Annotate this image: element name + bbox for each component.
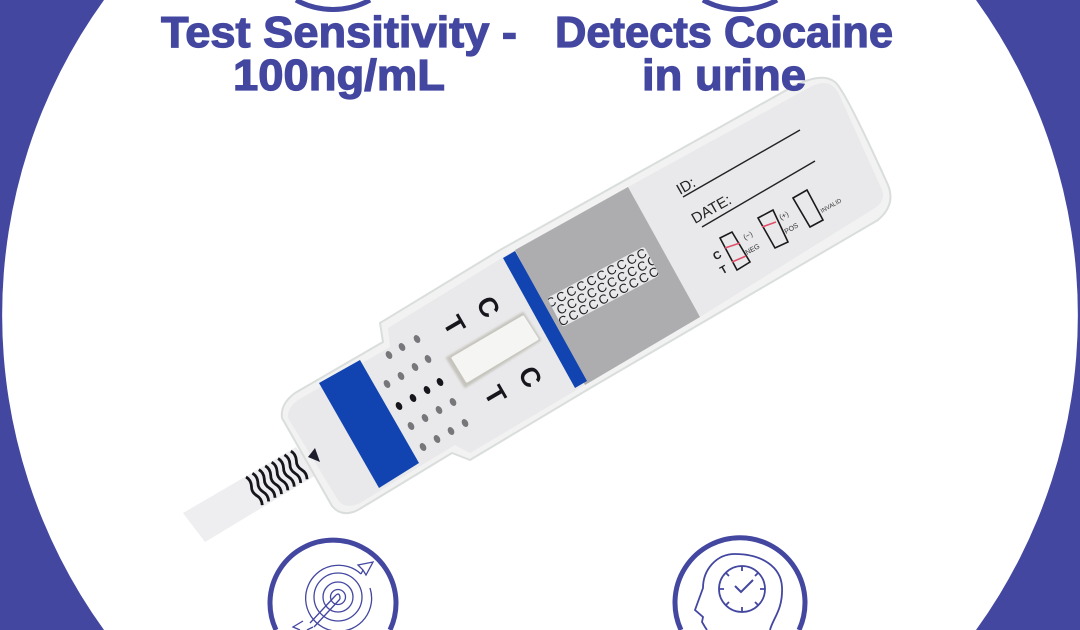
foil window: CCCCCCCCCCCC: [556, 252, 683, 329]
heading: test sensitivity: [161, 8, 517, 100]
strip wave marks: [245, 450, 308, 506]
positive result box: POS: [784, 222, 800, 236]
negative result box: C: [711, 249, 724, 263]
device body: [282, 78, 890, 513]
window labels: [437, 291, 548, 410]
window labels: T: [478, 380, 512, 410]
foil window: CCCCCCCCCCCC: [543, 233, 671, 311]
positive result box: (+): [778, 209, 791, 222]
window labels: C: [512, 361, 548, 393]
test device illustration: [183, 78, 890, 542]
device face: [288, 83, 883, 506]
heading: detects cocaine: Detects Cocaine: [555, 8, 893, 57]
foil window: CCCCCCCCCCCC: [554, 240, 682, 318]
test strip: [183, 447, 318, 542]
icon: target with arrow: [270, 540, 396, 630]
icon: cropped circle top left: [296, 0, 370, 9]
invalid result box: INVALID: [820, 198, 843, 215]
sample dots: [382, 334, 470, 452]
negative result box: T: [718, 263, 730, 277]
blue band: [319, 360, 419, 488]
result legend: [711, 190, 843, 277]
negative result box: NEG: [745, 243, 761, 257]
window labels: C: [470, 291, 506, 323]
icon: head with clock: [675, 538, 805, 630]
ID field: [674, 130, 800, 198]
blue stripe: [503, 251, 587, 388]
positive result box: [758, 209, 800, 248]
heading: test sensitivity: Test Sensitivity -: [161, 8, 517, 57]
heading: test sensitivity: 100ng/mL: [233, 51, 445, 100]
grey panel: [515, 187, 700, 385]
negative result box: [711, 229, 761, 277]
icon: cropped circle top right: [703, 0, 777, 9]
result window: [447, 313, 540, 387]
DATE field: [689, 161, 815, 227]
ID field: ID:: [674, 174, 699, 198]
negative result box: (−): [742, 229, 755, 242]
arrow marker: [308, 448, 320, 462]
heading: detects cocaine: [555, 8, 893, 100]
window labels: T: [437, 310, 471, 340]
DATE field: DATE:: [689, 191, 734, 227]
foil window: [548, 247, 658, 326]
heading: detects cocaine: in urine: [642, 51, 806, 100]
